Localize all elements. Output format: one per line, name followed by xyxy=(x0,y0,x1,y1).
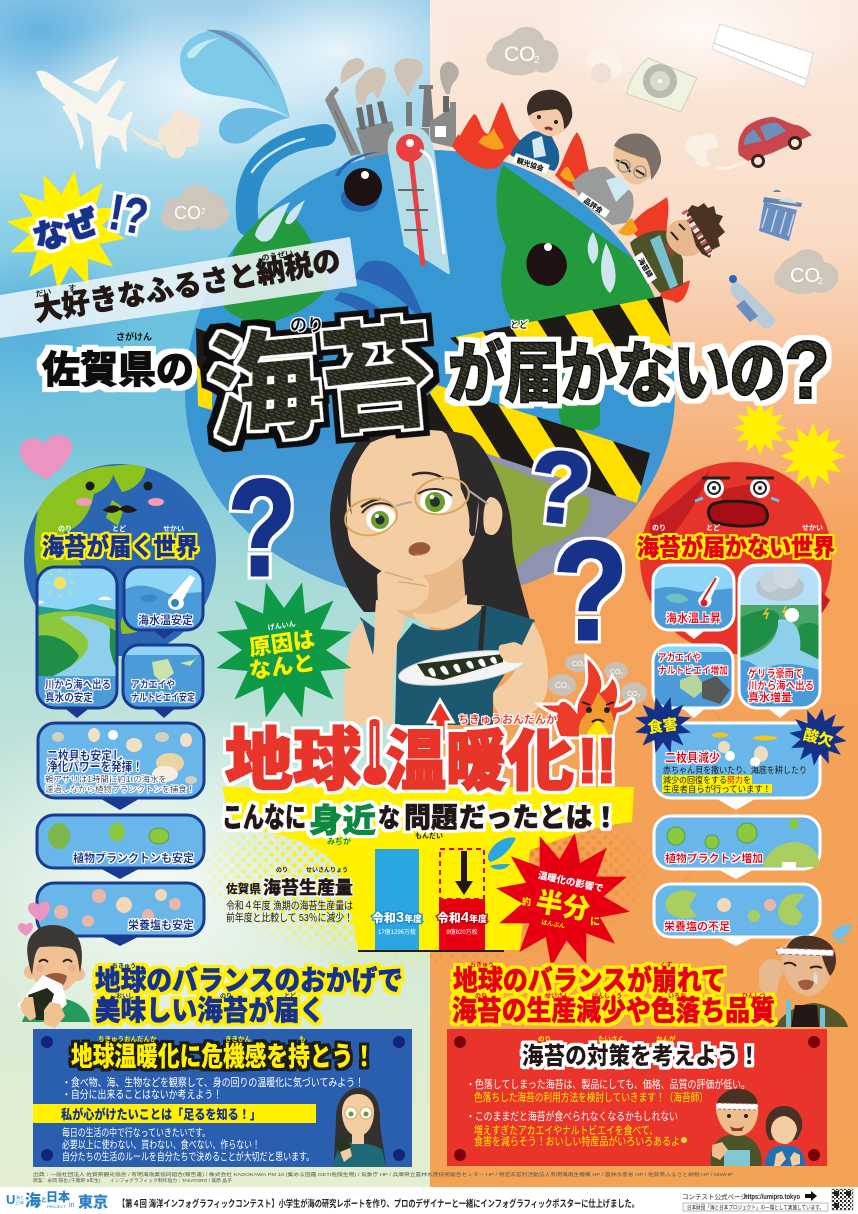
source credits: 原案：永岡 陽也 (千葉県 5年生) インフォグラフィック制作協力：TAKATORO / 髙原 晶子 xyxy=(33,1177,232,1184)
card: sea temperature rising: 海水温上昇 xyxy=(666,611,721,625)
small woman character xyxy=(332,1088,386,1167)
panel text: ・色落してしまった海苔は、製品にしても、価格、品質の評価が低い。 xyxy=(466,1077,750,1091)
heading: balance keeps nori: 地球のバランスのおかげで xyxy=(95,965,403,996)
title banner: 大好きなふるさと納税の xyxy=(32,244,343,328)
card: stable rays: ナルトビエイ安定 xyxy=(131,691,195,704)
card: rays increase: アカエイや xyxy=(658,652,701,664)
card: bivalves decrease: 赤ちゃん貝を撒いたり、海底を耕したり xyxy=(663,765,807,775)
icon: airplane xyxy=(36,56,133,169)
icon: CO2 cloud top: 2 xyxy=(534,55,540,66)
title: nori big text: 海苔 xyxy=(203,309,439,460)
logo: umi to nippon project: 海 xyxy=(25,1191,41,1210)
fire character with CO2 clouds: CO₂ xyxy=(572,661,586,668)
heading: world where nori does not arrive: とど xyxy=(706,523,720,532)
panel heading: たいさく xyxy=(598,1034,624,1043)
heading: global warming: 地球 xyxy=(225,723,361,799)
badge: about half: に xyxy=(590,916,600,928)
panel text: 食害を減らそう！おいしい特産品がいろいろあるよ xyxy=(474,1134,680,1148)
heading: balance collapsed: 地球のバランスが崩れて xyxy=(453,964,726,996)
badge: about half xyxy=(484,821,642,979)
icon: sweat drop xyxy=(488,837,516,870)
fire character with CO2 clouds: CO₂ xyxy=(627,691,640,698)
heading: balance collapsed: げんしょう xyxy=(592,992,622,1000)
text: nori production: 令和４年度 漁期の海苔生産量は xyxy=(226,899,353,912)
icon: CO2 cloud top xyxy=(486,27,558,75)
card: rays increase xyxy=(653,645,733,718)
man crying xyxy=(759,936,848,1027)
person: nori farmer man xyxy=(630,203,725,293)
card: stable phytoplankton: 植物プランクトンも安定 xyxy=(73,851,194,865)
panel heading: ちきゅうおんだんか xyxy=(98,1034,157,1043)
text: nori production: のり xyxy=(276,866,288,874)
contest url xyxy=(682,1191,817,1201)
logo: umi to nippon project: 東京 xyxy=(78,1193,108,1211)
card: rays increase: ナルトビエイ増加 xyxy=(658,664,728,677)
icon: CO2 cloud right: CO xyxy=(790,265,820,287)
heading: balance keeps nori xyxy=(95,962,403,1026)
heading: balance keeps nori: のり xyxy=(220,992,232,1000)
heading: global warming xyxy=(225,700,616,799)
source credits: 出典：一般社団法人 佐賀県観光協会 / 有明海漁業協同組合(報告書) / 株式会社 KADOKAWA PM 10 (集める図鑑 GET!危険生物) / 気象庁 HP / 兵庫県立農林水産技術総合センター HP / 特定非営利活動法人有明海再生機構 HP / 農林水産省 HP / 佐賀県ふるさと納税 HP / NIWHP xyxy=(33,1171,733,1178)
heading: balance keeps nori: ちきゅう xyxy=(112,962,136,970)
card: stable fresh water: 真水の安定 xyxy=(45,690,93,704)
title: does not arrive: が届かないの xyxy=(448,336,786,410)
card: stable phytoplankton xyxy=(37,815,204,879)
icon: air conditioner xyxy=(712,24,813,87)
text: nori production: 佐賀県 xyxy=(226,881,261,896)
panel heading: 海苔の対策を考えよう！ xyxy=(522,1042,760,1070)
text: nori production: 前年度と比較して 53％に減少！ xyxy=(226,911,353,924)
title: does not arrive: とど xyxy=(510,319,528,330)
contest description: 【第４回 海洋インフォグラフィックコンテスト】小学生が海の研究レポートを作り、プロのデザイナーと一緒にインフォグラフィックポスターに仕上げました。 xyxy=(118,1198,639,1210)
badge: oxygen deficiency: 酸欠 xyxy=(801,725,835,751)
card: bivalves decrease: 二枚貝減少 xyxy=(665,750,720,765)
heading: balance collapsed: のり xyxy=(475,992,487,1000)
globe: angry red earth xyxy=(640,462,832,660)
title: Saga prefecture: さがけん xyxy=(116,331,152,342)
icon: factory xyxy=(325,58,459,159)
panel: awareness of warming xyxy=(33,1029,412,1167)
heading: balance collapsed: せいさん xyxy=(545,993,569,1000)
logo: umi to nippon project xyxy=(6,1189,108,1211)
small farmer and woman characters xyxy=(711,1089,805,1166)
man eating onigiri xyxy=(17,925,90,1028)
icon: plane exhaust cloud xyxy=(128,110,201,158)
fish eyes on globe xyxy=(335,152,616,293)
hazard stripes xyxy=(196,296,672,503)
heading: balance collapsed: 海苔の生産減少や色落ち品質 xyxy=(452,995,775,1026)
person: inspector man in suit xyxy=(572,134,661,225)
heading: so close a problem: こんなに xyxy=(222,802,306,833)
heading: world where nori arrives xyxy=(42,524,198,561)
badge: about half: はんぶん xyxy=(541,919,566,930)
heading: world where nori arrives: とど xyxy=(112,524,126,533)
small hearts xyxy=(18,901,50,936)
panel heading: のり xyxy=(538,1034,551,1043)
text: nori production: 海苔生産量 xyxy=(263,877,353,898)
heading: balance keeps nori: とど xyxy=(284,992,296,1000)
person: inspector man in suit: 品評会 xyxy=(582,196,605,215)
heading: so close a problem: もんだい xyxy=(415,832,443,840)
heading: balance collapsed xyxy=(452,961,775,1026)
badge: about half: 約 xyxy=(522,896,531,907)
yellow callout: 私が心がけたいことは「足るを知る！」 xyxy=(61,1107,261,1122)
icon: water drop splash xyxy=(180,30,290,144)
sweat drop decoration xyxy=(832,925,852,943)
heading: balance collapsed: ひんしつ xyxy=(742,993,766,1000)
yellow callout xyxy=(33,1104,316,1123)
title banner: のうぜい xyxy=(261,249,294,263)
heading: world where nori arrives: 海苔が届く世界 xyxy=(42,533,198,561)
person: tourism association woman: 観光協会 xyxy=(515,156,545,173)
card: stable bivalves: 濾過しながら植物プランクトンを捕食！ xyxy=(45,784,195,794)
heading: world where nori arrives: のり xyxy=(58,524,72,533)
logo: umi to nippon project: in xyxy=(69,1202,75,1209)
icon: CO2 cloud right xyxy=(774,249,838,294)
card: stable fresh water xyxy=(37,567,122,718)
panel heading: 地球温暖化に危機感を持とう！ xyxy=(71,1041,375,1072)
card: phytoplankton increase: 植物プラクトン増加 xyxy=(665,851,763,865)
card: nutrient shortage xyxy=(654,884,820,946)
question marks xyxy=(228,429,628,669)
bar chart: 17億1296万枚 xyxy=(378,928,416,936)
heading: global warming: 温暖 xyxy=(386,724,506,798)
logo: umi to nippon project: U xyxy=(6,1192,15,1207)
panel heading: ききかん xyxy=(225,1035,252,1043)
panel heading xyxy=(71,1034,375,1072)
halftone yellow panel xyxy=(190,780,670,975)
icon: trash can xyxy=(759,190,802,241)
heading: world where nori does not arrive: のり xyxy=(652,523,666,532)
card: stable bivalves: 親アサリは1時間に約1ℓの海水を xyxy=(45,774,167,784)
card: bivalves decrease: 減少の回復をする努力を xyxy=(663,775,751,785)
woman character xyxy=(330,430,548,725)
panel paragraph: 自分たちの生活のルールを自分たちで決めることが大切だと思います。 xyxy=(62,1150,314,1163)
icon: car with exhaust xyxy=(685,117,812,169)
heading: so close a problem xyxy=(222,802,619,846)
card: stable bivalves: 二枚貝も安定し xyxy=(47,748,123,763)
logo: umi to nippon project: PROJECT xyxy=(47,1204,66,1209)
heading: world where nori does not arrive: せかい xyxy=(802,524,823,532)
panel paragraph: 必要以上に使わない、買わない、食べない、作らない！ xyxy=(62,1138,260,1151)
heading: balance keeps nori: 美味しい海苔が届く xyxy=(95,994,325,1026)
icon: CO2 cloud top: CO xyxy=(504,43,536,66)
badge: naze: !? xyxy=(105,184,152,245)
panel text: ・このままだと海苔が食べられなくなるかもしれない xyxy=(466,1109,678,1123)
heading: global warming: ちきゅうおんだんか xyxy=(458,713,557,726)
heading: so close a problem: だったとは！ xyxy=(459,803,619,833)
icon: CO2 cloud left: CO xyxy=(174,203,201,223)
panel bullets xyxy=(62,1075,364,1101)
fire character with CO2 clouds: CO₂ xyxy=(610,669,624,676)
title: Saga prefecture xyxy=(42,331,194,392)
panel heading xyxy=(522,1034,760,1070)
card: stable sea temperature: 海水温安定 xyxy=(138,613,193,627)
badge: the cause is: げんいん xyxy=(267,619,296,632)
question marks: ? xyxy=(525,429,596,547)
person: nori farmer man: 海苔師 xyxy=(636,256,655,279)
heading: balance collapsed: ちきゅう xyxy=(470,961,494,969)
bar chart: 令和3年度 xyxy=(372,909,422,926)
card: stable bivalves xyxy=(38,723,204,810)
heading: balance collapsed: いろお xyxy=(668,993,686,1000)
contest url: https://umipro.tokyo xyxy=(744,1192,800,1201)
heading: so close a problem: みぢか xyxy=(327,836,351,846)
heading: global warming: !! xyxy=(578,727,616,796)
title banner: す xyxy=(68,284,76,293)
card: sea temperature rising xyxy=(653,565,734,639)
heading: world where nori arrives: せかい xyxy=(163,525,184,533)
badge: about half: 半分 xyxy=(534,887,592,925)
text: nori production: せいさんりょう xyxy=(306,866,348,874)
foundation note: 日本財団「海と日本プロジェクト」の一環として実施しています。 xyxy=(687,1204,824,1212)
text: nori production xyxy=(226,866,353,924)
card: phytoplankton increase xyxy=(654,816,820,879)
fire behind people xyxy=(452,102,690,303)
badge: about half: 温暖化の影響で xyxy=(537,869,604,895)
card: stable sea temperature xyxy=(124,567,203,639)
logo: umi to nippon project: 日本 xyxy=(46,1189,70,1204)
heading: balance collapsed: くず xyxy=(660,961,672,969)
logo: umi to nippon project: 海と xyxy=(16,1194,24,1200)
card: stable nutrient salts: 栄養塩も安定 xyxy=(128,918,194,932)
title banner: だい xyxy=(35,287,52,299)
badge: predation xyxy=(627,689,699,761)
badge: the cause is xyxy=(198,564,370,736)
card: stable nutrient salts xyxy=(37,883,204,946)
globe xyxy=(185,124,675,588)
badge: naze: なぜ xyxy=(29,202,103,258)
badge: oxygen deficiency xyxy=(785,704,851,770)
card: bivalves decrease: 生産者自らが行っています！ xyxy=(663,784,771,794)
bar chart: 9億820万枚 xyxy=(446,928,478,936)
panel paragraph: 毎日の生活の中で行なっていきたいです。 xyxy=(62,1126,210,1139)
QR code xyxy=(832,1189,853,1210)
badge: the cause is: 原因は xyxy=(248,627,316,661)
icon: yellow bursts xyxy=(733,401,846,489)
foundation note xyxy=(683,1203,828,1212)
badge: naze xyxy=(0,162,152,298)
panel heading: かんが xyxy=(656,1034,676,1043)
person: tourism association woman xyxy=(510,90,572,174)
heading: world where nori does not arrive: 海苔が届かない世界 xyxy=(637,534,835,560)
panel: nori countermeasures xyxy=(447,1029,827,1166)
title: does not arrive: ? xyxy=(784,325,830,416)
panel text: 色落ちした海苔の利用方法を検討していきます！（海苔師） xyxy=(474,1090,708,1104)
panel bullets: ・自分に出来ることはないか考えよう！ xyxy=(62,1088,222,1101)
icon: CO2 cloud left: 2 xyxy=(201,207,206,216)
title: Saga prefecture: 佐賀県の xyxy=(42,350,194,392)
question marks: ? xyxy=(228,452,296,605)
card: stable rays xyxy=(123,645,203,718)
heading: world where nori does not arrive xyxy=(637,523,835,560)
card: guerrilla rainstorm: ゲリラ豪雨で xyxy=(748,666,803,680)
panel text: 増えすぎたアカエイやナルトビエイを食べて、 xyxy=(474,1123,658,1137)
icon: thermometer on globe xyxy=(388,126,450,274)
heading: so close a problem: 問題 xyxy=(404,802,458,833)
panel heading: も xyxy=(299,1035,306,1043)
source credits xyxy=(33,1171,733,1184)
icon: air conditioner outdoor unit xyxy=(587,46,697,112)
icon: CO2 cloud left xyxy=(161,184,229,231)
badge: the cause is: なんと xyxy=(248,650,316,684)
card: stable bivalves: 浄化パワーを発揮！ xyxy=(47,759,143,774)
heading: so close a problem: な xyxy=(378,803,400,833)
title: nori big text: のり xyxy=(290,316,324,335)
icon: CO2 cloud right: 2 xyxy=(818,276,823,286)
heading: global warming: 化 xyxy=(506,724,574,798)
card: guerrilla rainstorm: 真水増量 xyxy=(748,690,792,704)
logo: umi to nippon project: 日本 xyxy=(16,1199,24,1205)
heading: balance keeps nori: おいし xyxy=(116,993,134,1000)
icon: plastic bottle xyxy=(729,275,775,328)
card: nutrient shortage: 栄養塩の不足 xyxy=(664,919,730,933)
card: bivalves decrease xyxy=(654,723,820,810)
bar chart xyxy=(358,849,504,952)
globe: happy earth xyxy=(24,464,216,656)
panel bullets: ・食べ物、海、生物などを観察して、身の回りの温暖化に気づいてみよう！ xyxy=(62,1075,364,1089)
card: guerrilla rainstorm xyxy=(739,565,820,718)
icon: pink heart xyxy=(20,435,72,480)
fire character with CO2 clouds: CO₂ xyxy=(555,681,570,690)
logo: umi to nippon project: と xyxy=(41,1197,47,1204)
badge: predation: 食害 xyxy=(647,715,679,737)
heading: so close a problem: 身近 xyxy=(309,802,376,839)
glasses and eyes xyxy=(342,473,488,539)
panel paragraph xyxy=(62,1126,314,1163)
card: guerrilla rainstorm: 川から海へ出る xyxy=(748,678,814,692)
fire character with CO2 clouds xyxy=(538,654,647,742)
panel text xyxy=(466,1077,750,1148)
card: stable fresh water: 川から海へ出る xyxy=(45,677,111,691)
contest url: コンテスト公式ページ xyxy=(682,1192,747,1201)
bar chart: 令和4年度 xyxy=(437,909,487,926)
card: stable rays: アカエイや xyxy=(131,679,175,691)
question marks: ? xyxy=(553,512,628,669)
